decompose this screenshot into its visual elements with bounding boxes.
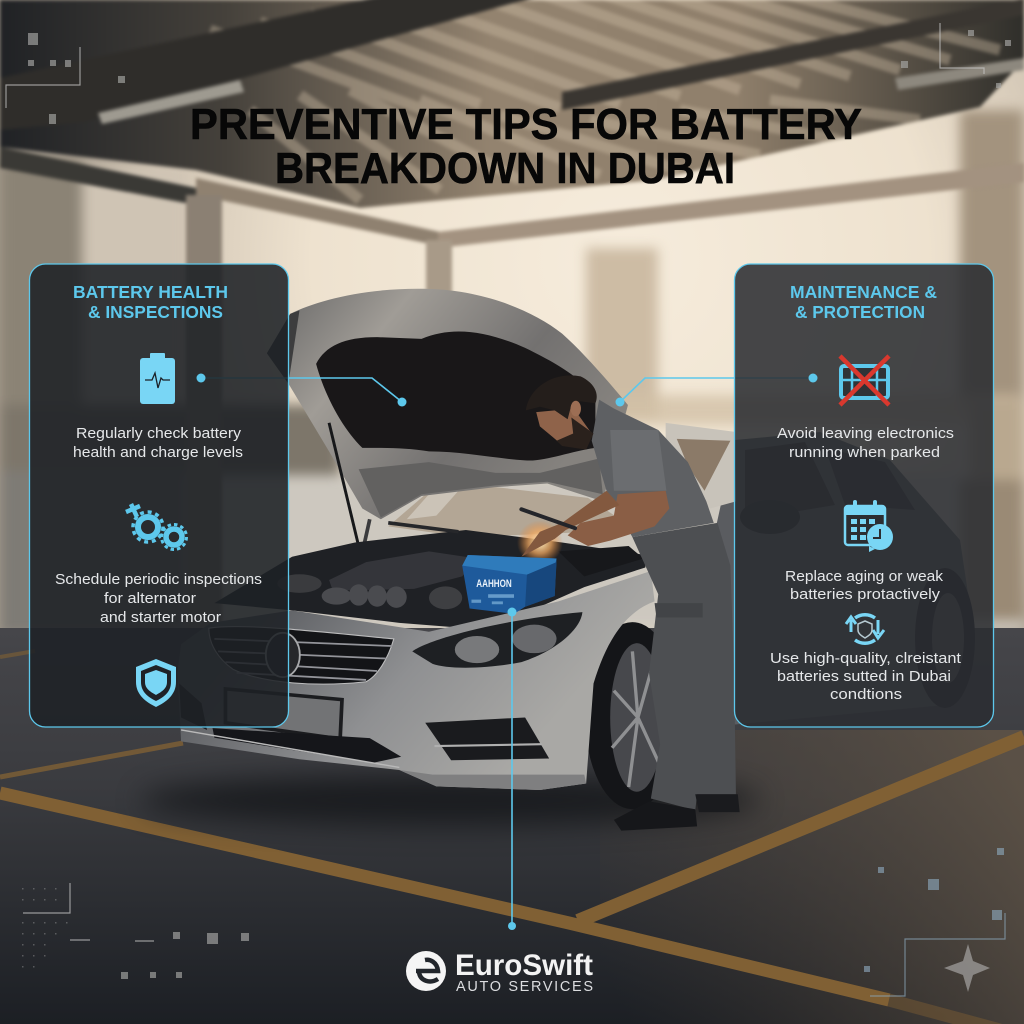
tip text: high-quality batteries: batteries sutted in Dubai [777,668,951,685]
tip text: high-quality batteries: Use high-quality, clreistant [770,650,962,667]
car and mechanic illustration [177,289,740,831]
icon: gears [126,504,186,550]
car: engine bay [214,523,645,628]
icon: cycle arrows and shield [846,615,884,643]
connector lines [201,378,813,926]
tip text: high-quality batteries: condtions [830,686,902,703]
background: hazy sky, skyline and low wall [0,0,1024,640]
tip text: schedule inspections: for alternator [104,590,196,607]
parking lot ground with painted lines [0,628,1024,1024]
tip text: schedule inspections [55,571,262,626]
car: rear side body [700,432,975,725]
tip text: replace batteries [785,568,944,603]
icon: calendar with clock [845,500,893,552]
tip text: replace batteries: Replace aging or weak [785,568,944,585]
tip text: replace batteries: batteries protactively [790,586,941,603]
battery with sparks [462,520,563,614]
icon: shield [136,659,176,707]
heading: battery health [73,282,228,322]
panel: maintenance and protection [734,264,994,727]
tip text: schedule inspections: and starter motor [100,609,221,626]
panel: battery health and inspections [30,264,288,727]
tip text: schedule inspections: Schedule periodic inspections [55,571,262,588]
heading: maintenance: MAINTENANCE & [790,282,937,302]
battery with sparks: AAHHON [476,578,512,590]
logo: EuroSwift Auto Services [406,949,593,995]
logo: EuroSwift Auto Services: AUTO SERVICES [456,979,593,995]
title: PREVENTIVE TIPS FOR BATTERY [190,100,862,149]
background: canopy roof and support beams [0,0,1024,640]
car: open hood [267,289,628,546]
title: BREAKDOWN IN DUBAI [275,144,735,193]
tip text: check battery: health and charge levels [73,444,243,461]
icon: battery pulse [140,353,175,404]
title [190,100,862,193]
tip text: avoid electronics [777,425,954,461]
mechanic in grey overalls [521,375,740,831]
tip text: avoid electronics: running when parked [789,444,940,461]
heading: battery health: & INSPECTIONS [88,302,223,322]
tip text: high-quality batteries [770,650,962,703]
car: front body, grille, headlight [177,571,680,809]
icon: battery crossed out [840,356,889,405]
heading: maintenance: & PROTECTION [795,302,925,322]
car: windshield [388,423,736,537]
tip text: check battery [73,425,243,461]
tip text: avoid electronics: Avoid leaving electronics [777,425,954,442]
tip text: check battery: Regularly check battery [76,425,242,442]
heading: battery health: BATTERY HEALTH [73,282,228,302]
heading: maintenance [790,282,937,322]
logo: EuroSwift Auto Services: EuroSwift [455,949,593,982]
connector dots [196,374,818,930]
